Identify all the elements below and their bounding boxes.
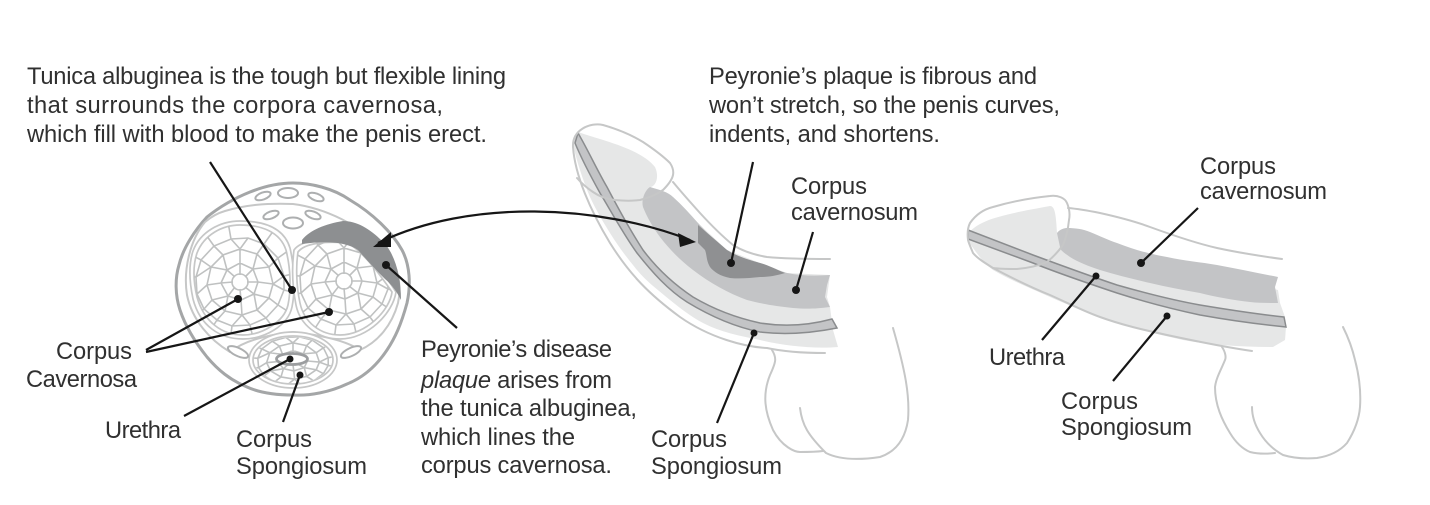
- label: corpus spongiosum, normal: Corpus: [1061, 389, 1138, 415]
- pointer: tunica albuginea: [210, 162, 296, 294]
- shaft upper outline: [673, 182, 830, 259]
- text: plaque effect: Peyronie’s plaque is fibrous and: [709, 64, 1037, 90]
- urethra band: [968, 230, 1286, 327]
- label: corpus cavernosa: Cavernosa: [26, 367, 138, 393]
- pointer: urethra, normal: [1042, 272, 1100, 340]
- pointer: corpus cavernosum, curved: [792, 232, 813, 294]
- pointer: plaque: [727, 162, 753, 267]
- outer skin outline: [176, 183, 409, 395]
- label: corpus cavernosum, curved: cavernosum: [791, 200, 918, 226]
- pointer: corpus spongiosum, normal: [1113, 312, 1170, 381]
- text: plaque origin: plaque arises from: [420, 368, 612, 394]
- pointer: corpus spongiosum: [283, 372, 304, 422]
- corpus cavernosum fill: [642, 187, 830, 309]
- text: plaque effect: indents, and shortens.: [709, 122, 940, 148]
- shaft lower outline: [573, 147, 825, 353]
- label: corpus spongiosum, curved: [651, 427, 782, 480]
- light body fill: [574, 132, 838, 348]
- label: corpus spongiosum: [236, 427, 367, 480]
- label: corpus spongiosum, curved: Spongiosum: [651, 454, 782, 480]
- normal penis diagram: [967, 196, 1360, 458]
- label: corpus cavernosum, normal: cavernosum: [1200, 179, 1327, 205]
- label: corpus spongiosum, curved: Corpus: [651, 427, 727, 453]
- glans outline: [968, 196, 1070, 269]
- intro text: tunica albuginea: [26, 64, 506, 148]
- left corpus: [189, 220, 294, 340]
- glans outline: [573, 124, 673, 201]
- intro text: tunica albuginea: Tunica albuginea is the tough but flexible lining: [27, 64, 506, 90]
- text: plaque effect: won’t stretch, so the penis curves,: [708, 93, 1060, 119]
- text: plaque origin: corpus cavernosa.: [421, 453, 612, 479]
- label: corpus cavernosum, normal: [1200, 154, 1327, 205]
- text: plaque origin: which lines the: [420, 425, 575, 451]
- cross-section diagram: [176, 183, 409, 395]
- shaft lower outline: [993, 268, 1252, 351]
- label: corpus spongiosum, normal: Spongiosum: [1061, 415, 1192, 441]
- urethra band: [575, 133, 837, 333]
- pointer: urethra: [184, 356, 294, 416]
- right corpus: [292, 242, 397, 340]
- intro text: tunica albuginea: which fill with blood to make the penis erect.: [26, 122, 487, 148]
- pointer: corpus spongiosum, curved: [717, 330, 758, 423]
- label: corpus spongiosum: Corpus: [236, 427, 312, 453]
- label: corpus spongiosum: Spongiosum: [236, 454, 367, 480]
- plaque fill: [698, 225, 785, 278]
- scrotum outline: [1215, 347, 1275, 454]
- corpus cavernosum fill: [1057, 228, 1278, 303]
- vessels and ovals: [226, 188, 363, 360]
- label: corpus cavernosum, normal: Corpus: [1200, 154, 1276, 180]
- label: corpus spongiosum, normal: [1061, 389, 1192, 441]
- intro text: tunica albuginea: that surrounds the corpora cavernosa,: [27, 93, 443, 119]
- text: plaque origin: the tunica albuginea,: [421, 396, 637, 422]
- label: urethra: Urethra: [105, 418, 182, 444]
- inner fascia outline: [186, 204, 399, 352]
- pointer: plaque origin: [382, 261, 457, 328]
- light body fill: [967, 206, 1286, 347]
- text: plaque effect: [708, 64, 1060, 148]
- text: plaque origin: Peyronie’s disease: [421, 337, 612, 363]
- text: plaque origin: [420, 337, 637, 479]
- double-headed arrow: [373, 211, 696, 247]
- label: corpus cavernosa: Corpus: [56, 339, 132, 365]
- label: corpus cavernosum, curved: [791, 174, 918, 226]
- scrotum outline: [765, 350, 823, 452]
- pointers: corpus cavernosa: [146, 295, 333, 352]
- label: urethra, normal: Urethra: [989, 345, 1066, 371]
- corpus spongiosum: [248, 331, 338, 389]
- label: corpus cavernosum, curved: Corpus: [791, 174, 867, 200]
- plaque: [302, 221, 401, 300]
- shaft upper outline: [1068, 208, 1282, 259]
- curved penis diagram: [573, 124, 908, 459]
- pointer: corpus cavernosum, normal: [1137, 208, 1198, 267]
- label: corpus cavernosa: [26, 339, 138, 393]
